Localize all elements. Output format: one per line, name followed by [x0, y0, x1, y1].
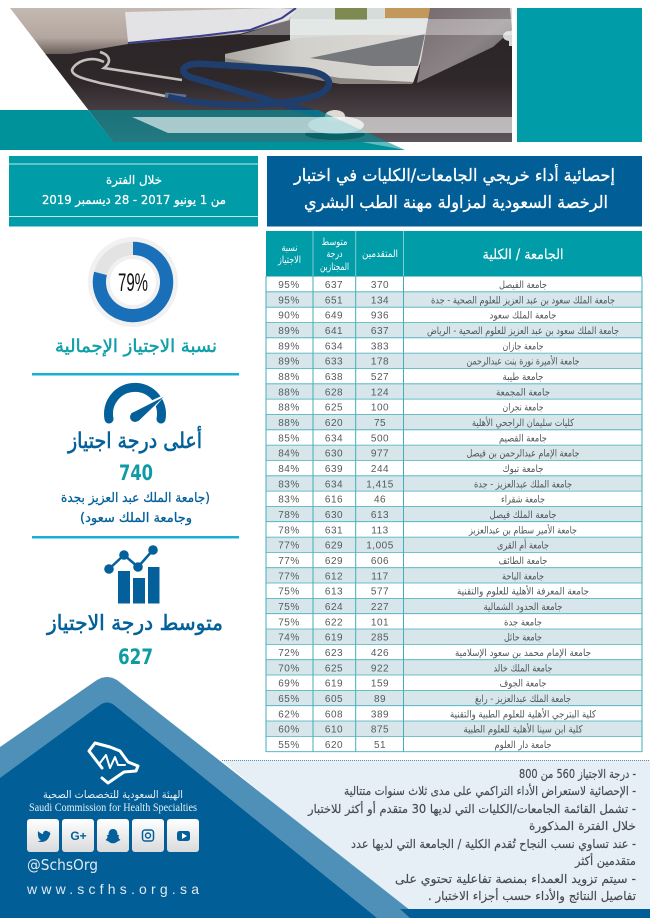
table header: الجامعة / الكلية — [482, 247, 564, 263]
table rows: 69% — [278, 679, 300, 690]
teal translucent band — [0, 110, 405, 150]
table row stripes — [266, 292, 642, 736]
table rows: 625 — [325, 403, 343, 414]
table rows: 159 — [371, 679, 389, 690]
table rows: 88% — [278, 372, 300, 383]
table rows: 83% — [278, 479, 300, 490]
table rows: جامعة الفيصل — [499, 280, 547, 291]
title panel: الرخصة السعودية لمزاولة مهنة الطب البشري — [304, 193, 608, 213]
table rows: 65% — [278, 694, 300, 705]
table rows: جامعة الملك عبدالعزيز - جدة — [474, 479, 572, 490]
table rows: 577 — [371, 587, 389, 598]
table rows: 1,415 — [366, 479, 394, 490]
table rows: جامعة الإمام محمد بن سعود الإسلامية — [455, 648, 591, 659]
title panel: إحصائية أداء خريجي الجامعات/الكليات في اختبار — [293, 164, 615, 186]
table rows: 977 — [371, 449, 389, 460]
heading: overall pass rate: نسبة الاجتياز الإجمالية — [55, 336, 217, 357]
icon: instagram — [132, 819, 164, 852]
table rows: 89% — [278, 326, 300, 337]
teal square — [517, 8, 642, 142]
table rows: 77% — [278, 541, 300, 552]
table rows: 89% — [278, 357, 300, 368]
period panel: خلال الفترة — [106, 173, 162, 188]
footer shapes — [0, 677, 650, 918]
icon: speedometer gauge — [108, 387, 166, 423]
table rows: جامعة المعرفة الأهلية للعلوم والتقنية — [457, 585, 589, 598]
table rows: كليات سليمان الراجحي الأهلية — [472, 416, 574, 429]
notes text block: تفاصيل النتائج والأداء حسب أجزاء الاختبار . — [428, 888, 636, 904]
table rows: 628 — [325, 387, 343, 398]
notes text block — [307, 767, 636, 904]
text: top universities — [61, 491, 210, 526]
table rows: جامعة الطائف — [498, 556, 548, 567]
table rows: 100 — [371, 403, 389, 414]
table rows: 77% — [278, 571, 300, 582]
notes background panel — [222, 760, 650, 909]
social buttons — [27, 819, 199, 852]
table rows: 78% — [278, 525, 300, 536]
table rows — [278, 280, 619, 751]
table rows: 75% — [278, 587, 300, 598]
table rows: 84% — [278, 464, 300, 475]
donut chart: 79% pass rate: 79% — [118, 269, 148, 297]
table rows: 70% — [278, 663, 300, 674]
table rows: 124 — [371, 387, 389, 398]
notes text block: متقدمين أكثر — [574, 853, 636, 869]
title panel — [267, 156, 642, 226]
table rows: 623 — [325, 648, 343, 659]
table rows: 922 — [371, 663, 389, 674]
notes text block: - سيتم تزويد العمداء بمنصة تفاعلية تحتوي على — [395, 872, 636, 887]
icon: bar chart with trend line — [104, 545, 160, 604]
organisation name: Saudi Commission for Health Specialties — [29, 800, 197, 814]
table rows: 638 — [325, 372, 343, 383]
table rows: 612 — [325, 571, 343, 582]
table rows: 633 — [325, 357, 343, 368]
table header: الاجتياز — [277, 255, 301, 266]
table rows: 389 — [371, 709, 389, 720]
table rows: جامعة تبوك — [502, 464, 544, 475]
table rows: جامعة طيبة — [502, 372, 544, 383]
table rows: 608 — [325, 709, 343, 720]
table header: درجة — [326, 249, 342, 260]
table rows: 89% — [278, 341, 300, 352]
table rows: جامعة الحدود الشمالية — [484, 602, 562, 613]
table rows: 134 — [371, 295, 389, 306]
table rows: 383 — [371, 341, 389, 352]
table rows: جامعة الأمير سطام بن عبدالعزيز — [468, 523, 577, 536]
table rows: 244 — [371, 464, 389, 475]
table rows: جامعة جازان — [502, 341, 544, 352]
icon: snapchat — [97, 819, 129, 852]
table rows: 630 — [325, 510, 343, 521]
table rows: 85% — [278, 433, 300, 444]
table rows: جامعة الأميرة نورة بنت عبدالرحمن — [466, 355, 580, 368]
table rows: 622 — [325, 617, 343, 628]
table rows: 606 — [371, 556, 389, 567]
table rows: 77% — [278, 556, 300, 567]
table rows: 113 — [371, 525, 389, 536]
table rows: 117 — [371, 571, 389, 582]
table header: المجتازين — [320, 262, 349, 273]
table rows: 936 — [371, 311, 389, 322]
table rows: 426 — [371, 648, 389, 659]
table rows: جامعة نجران — [502, 403, 544, 414]
table rows: 637 — [325, 280, 343, 291]
table rows: 62% — [278, 709, 300, 720]
table header: نسبة — [282, 243, 298, 254]
table rows: 101 — [371, 617, 389, 628]
table rows: 625 — [325, 663, 343, 674]
table rows: جامعة شقراء — [501, 495, 545, 506]
table rows: 610 — [325, 725, 343, 736]
table rows: 637 — [371, 326, 389, 337]
table rows: 624 — [325, 602, 343, 613]
light stripes over photo — [132, 19, 512, 133]
table rows: جامعة المجمعة — [496, 387, 550, 398]
table rows: 55% — [278, 740, 300, 751]
table rows: 88% — [278, 387, 300, 398]
organisation name: الهيئة السعودية للتخصصات الصحية — [43, 789, 183, 801]
table rows: جامعة الملك عبدالعزيز - رابغ — [475, 694, 571, 705]
table rows: 649 — [325, 311, 343, 322]
table rows: 227 — [371, 602, 389, 613]
table rows: جامعة الملك خالد — [494, 663, 552, 674]
table rows: جامعة الجوف — [500, 679, 546, 690]
notes text block: خلال الفترة المذكورة — [529, 819, 636, 834]
table rows: جامعة أم القرى — [497, 539, 549, 552]
website: www.scfhs.org.sa — [26, 881, 199, 897]
table rows: 634 — [325, 341, 343, 352]
table rows: 370 — [371, 280, 389, 291]
table rows: 74% — [278, 633, 300, 644]
table rows: 639 — [325, 464, 343, 475]
table rows: كلية ابن سينا الأهلية للعلوم الطبية — [464, 723, 583, 736]
table rows: 75% — [278, 602, 300, 613]
table rows: جامعة الملك سعود بن عبد العزيز للعلوم الصحية - جدة — [431, 295, 615, 306]
text: top universities: (جامعة الملك عبد العزيز بجدة — [61, 491, 210, 506]
table rows: 875 — [371, 725, 389, 736]
table rows: 631 — [325, 525, 343, 536]
notes text block: - عند تساوي نسب النجاح تُقدم الكلية / الجامعة التي لديها عدد — [351, 837, 636, 852]
logo: Saudi Commission map outline — [89, 743, 138, 783]
table rows: 641 — [325, 326, 343, 337]
table rows: 78% — [278, 510, 300, 521]
hero photo: stethoscope and laptop — [0, 0, 515, 150]
table rows: 527 — [371, 372, 389, 383]
table rows: 630 — [325, 449, 343, 460]
table rows: 500 — [371, 433, 389, 444]
table rows: 651 — [325, 295, 343, 306]
table rows: 60% — [278, 725, 300, 736]
table rows: 619 — [325, 633, 343, 644]
period panel: من 1 يونيو 2017 - 28 ديسمبر 2019 — [42, 192, 226, 208]
table rows: 605 — [325, 694, 343, 705]
table rows: جامعة جدة — [504, 617, 542, 628]
table rows: 84% — [278, 449, 300, 460]
heading: average pass score: متوسط درجة الاجتياز — [46, 611, 223, 635]
icon: youtube — [167, 819, 199, 852]
table header — [266, 231, 642, 276]
donut chart: 79% pass rate — [88, 237, 178, 327]
table rows: جامعة حائل — [504, 633, 542, 644]
notes text block: - درجة الاجتياز 560 من 800 — [519, 767, 636, 782]
table rows: 634 — [325, 433, 343, 444]
table rows: 88% — [278, 418, 300, 429]
table rows: 613 — [371, 510, 389, 521]
table rows: جامعة الإمام عبدالرحمن بن فيصل — [466, 449, 580, 460]
icon: google plus — [62, 819, 94, 852]
table rows: 95% — [278, 280, 300, 291]
table rows: 285 — [371, 633, 389, 644]
table rows: 95% — [278, 295, 300, 306]
icon: twitter — [27, 819, 59, 852]
period panel — [9, 156, 258, 226]
table rows: 75% — [278, 617, 300, 628]
table rows: 178 — [371, 357, 389, 368]
table rows: 46 — [374, 495, 386, 506]
organisation name — [29, 789, 197, 814]
number: 740: 740 — [119, 461, 153, 485]
table rows: 51 — [374, 740, 386, 751]
heading: highest pass score: أعلى درجة اجتياز — [67, 426, 202, 454]
table rows: كلية البترجي الأهلية للعلوم الطبية والتقنية — [450, 707, 596, 720]
results table — [266, 231, 642, 752]
text: top universities: وجامعة الملك سعود) — [80, 511, 192, 526]
table rows: جامعة الملك سعود — [490, 311, 556, 322]
table rows: جامعة القصيم — [499, 433, 547, 444]
number: 627: 627 — [118, 645, 153, 669]
table rows: 629 — [325, 541, 343, 552]
table rows: 620 — [325, 418, 343, 429]
table rows: 620 — [325, 740, 343, 751]
table rows: 616 — [325, 495, 343, 506]
table rows: 89 — [374, 694, 386, 705]
table rows: 75 — [374, 418, 386, 429]
table rows: 1,005 — [366, 541, 394, 552]
table rows: 88% — [278, 403, 300, 414]
table rows: 629 — [325, 556, 343, 567]
table rows: 90% — [278, 311, 300, 322]
table rows: 613 — [325, 587, 343, 598]
social handle: @SchsOrg — [27, 856, 98, 874]
table header: متوسط — [322, 237, 348, 248]
table rows: جامعة الملك فيصل — [490, 510, 556, 521]
icon: google plus: G+ — [70, 829, 87, 843]
table rows: 634 — [325, 479, 343, 490]
table rows: 619 — [325, 679, 343, 690]
notes text block: - تشمل القائمة الجامعات/الكليات التي لديها 30 متقدم أو أكثر للاختبار — [307, 801, 636, 817]
table rows: 72% — [278, 648, 300, 659]
table rows: جامعة الباحة — [502, 571, 544, 582]
table rows: 83% — [278, 495, 300, 506]
table rows: جامعة دار العلوم — [494, 740, 552, 751]
table header: المتقدمين — [362, 249, 398, 260]
